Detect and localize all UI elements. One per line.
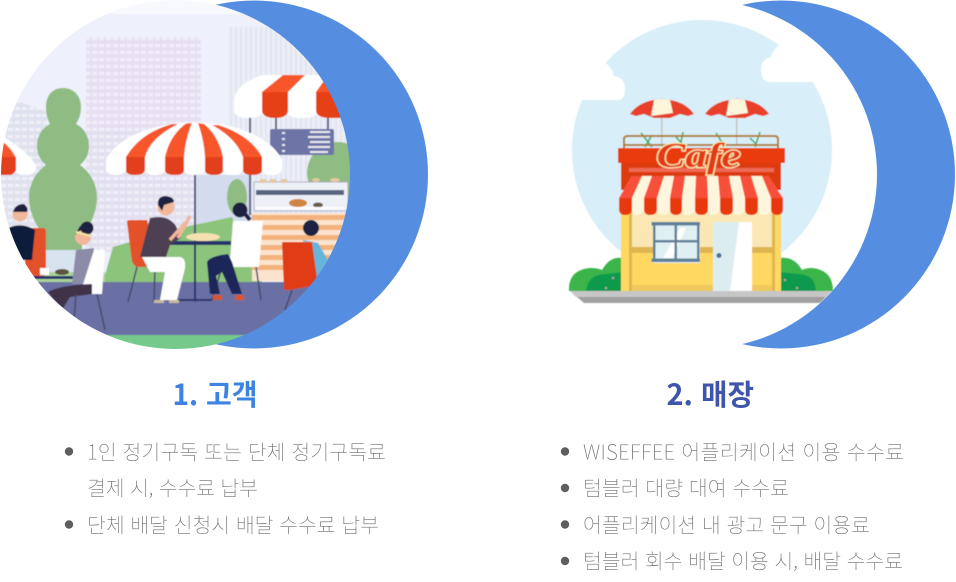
- table: [170, 232, 232, 302]
- text block: store bullets: [561, 436, 904, 574]
- panel: store illustration: [529, 0, 955, 348]
- text block: customer bullets: [65, 436, 386, 538]
- woman seated: [207, 202, 263, 300]
- text block: store bullets: 어플리케이션 내 광고 문구 이용료: [583, 508, 870, 538]
- left diners: [8, 204, 105, 330]
- cafe terrace scene: [0, 0, 369, 350]
- blue crescent behind customer scene: [80, 0, 428, 348]
- window: [652, 222, 700, 263]
- menu board: [270, 129, 334, 155]
- cafe sign: Cafe: [656, 136, 740, 175]
- seated child at counter: [282, 220, 328, 310]
- bullet markers: [561, 447, 569, 565]
- rooftop plants and railing: [624, 132, 778, 148]
- sidewalk: [570, 291, 832, 303]
- text block: customer bullets: 결제 시, 수수료 납부: [87, 472, 258, 502]
- roof and sign band: [618, 148, 785, 190]
- heading: store: 2. 매장: [666, 372, 754, 414]
- bushes: [569, 258, 833, 291]
- man seated: [127, 196, 190, 303]
- food counter: [252, 178, 350, 281]
- heading: customer: 1. 고객: [172, 372, 258, 414]
- bullet marker 1: [65, 447, 73, 456]
- text block: store bullets: WISEFFEE 어플리케이션 이용 수수료: [583, 436, 904, 466]
- text block: store bullets: 텀블러 회수 배달 이용 시, 배달 수수료: [583, 544, 903, 574]
- left awning: [0, 135, 36, 175]
- text block: store bullets: 텀블러 대량 대여 수수료: [583, 472, 789, 502]
- blue crescent behind store: [607, 0, 955, 348]
- large striped umbrella: [106, 122, 282, 302]
- text block: customer bullets: 단체 배달 신청시 배달 수수료 납부: [87, 508, 379, 538]
- door: [713, 222, 752, 291]
- storefront: [621, 200, 781, 291]
- striped awning: [619, 176, 783, 215]
- sky circle: [572, 20, 832, 254]
- top right awning: [234, 75, 352, 215]
- text block: customer bullets: 1인 정기구독 또는 단체 정기구독료: [87, 436, 386, 466]
- panel: customer illustration: [0, 0, 428, 350]
- patio umbrellas: [630, 98, 769, 146]
- road: [38, 281, 310, 336]
- grass: [103, 217, 262, 282]
- tree: [29, 88, 97, 250]
- bullet marker 2: [65, 520, 73, 529]
